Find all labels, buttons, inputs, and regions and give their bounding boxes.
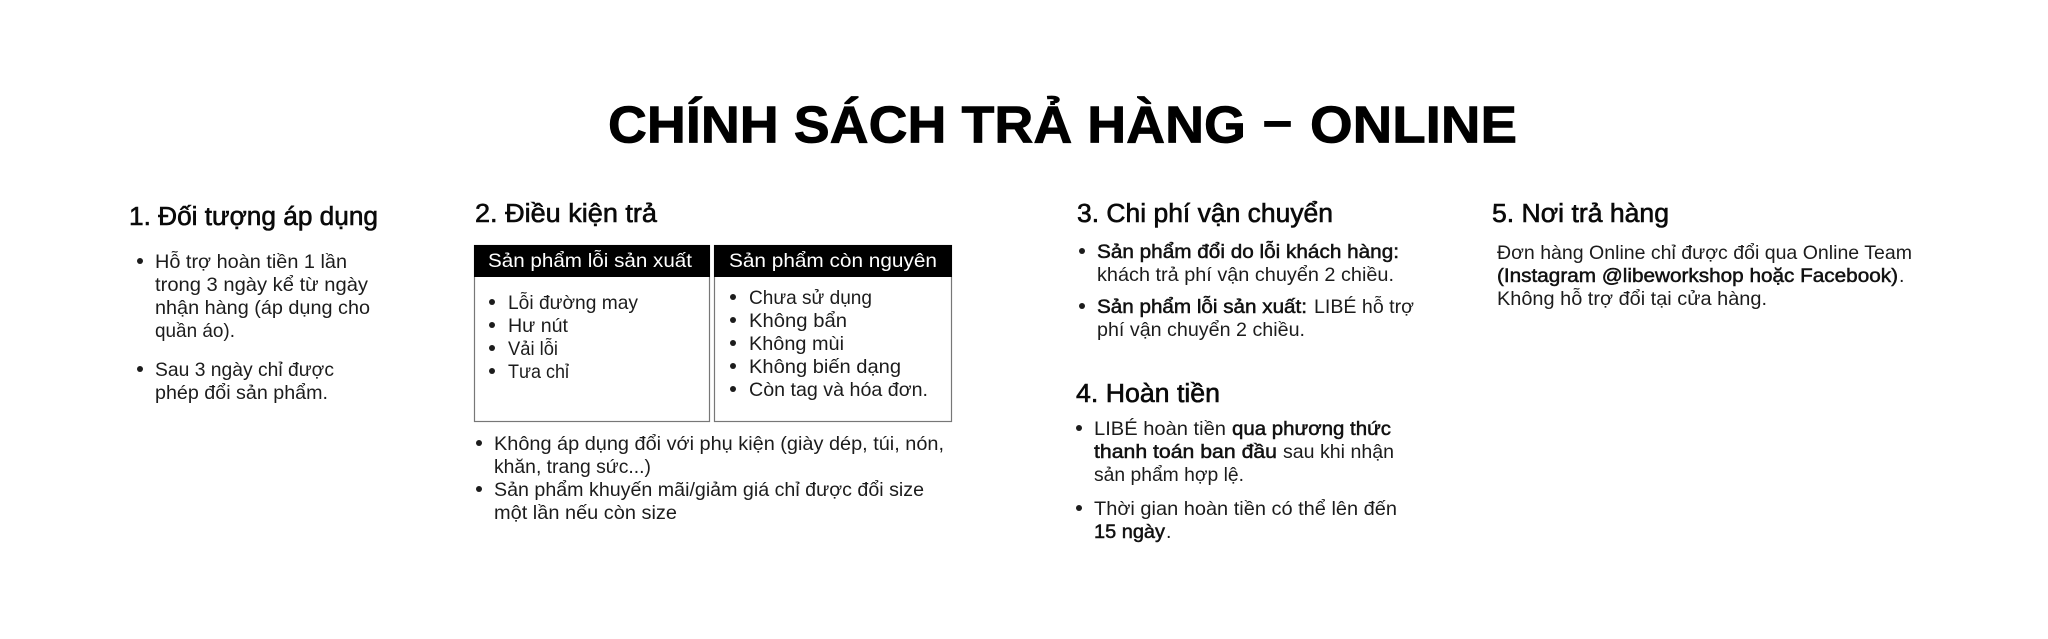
bullet list: section 4: thanh toán ban đầu [1094,441,1277,463]
bullet list: section 3: Sản phẩm lỗi sản xuất: [1097,295,1307,318]
bullet notes under tables: khăn, trang sức...) [494,456,651,478]
bullet notes under tables: Không áp dụng đổi với phụ kiện (giày dép, túi, nón, [494,433,944,455]
bullet notes under tables: một lần nếu còn size [494,502,677,524]
table card: manufacturing defects [474,245,710,422]
table card: manufacturing defects: Hư nút [508,315,569,337]
title: – [1263,92,1292,150]
table card: items in original condition: Sản phẩm còn nguyên [729,250,937,272]
panel: 2. return conditions [474,200,952,524]
text block: section 5 [1497,242,1912,310]
table card: items in original condition: Chưa sử dụng [749,287,872,309]
text block: section 5: (Instagram @libeworkshop hoặc Facebook) [1497,265,1898,287]
table card: manufacturing defects: Sản phẩm lỗi sản xuất [488,249,693,272]
bullet list: section 3: phí vận chuyển 2 chiều. [1097,319,1305,341]
title [608,92,1517,154]
bullet list: section 4 [1076,417,1397,543]
bullet list: section 4: LIBÉ hoàn tiền [1094,417,1226,440]
table card: manufacturing defects: Lỗi đường may [508,291,638,314]
bullet notes under tables: Sản phẩm khuyến mãi/giảm giá chỉ được đổi size [494,479,924,501]
bullet list: section 3: LIBÉ hỗ trợ [1314,295,1414,318]
bullet list: section 4: sau khi nhận [1283,441,1394,463]
bullet list: section 3: khách trả phí vận chuyển 2 chiều. [1097,264,1394,286]
table card: manufacturing defects: Tưa chỉ [508,361,570,383]
text block: section 5: . [1899,265,1904,287]
heading: section 5: 5. Nơi trả hàng [1492,200,1669,228]
panel: 1. applicable subjects [129,203,378,404]
bullet list: section 1: trong 3 ngày kể từ ngày [155,274,368,296]
table card: items in original condition: Không mùi [749,333,844,355]
panel: 4. refund [1076,380,1397,543]
bullet list: section 4: qua phương thức [1232,418,1391,440]
heading: section 2: 2. Điều kiện trả [475,200,658,228]
bullet list: section 4: Thời gian hoàn tiền có thể lên đến [1094,498,1397,520]
bullet list: section 4: sản phẩm hợp lệ. [1094,464,1244,486]
bullet list: section 1 [137,250,370,404]
bullet list: section 1: quần áo). [155,320,235,342]
bullet notes under tables [476,433,944,524]
heading: section 4: 4. Hoàn tiền [1076,380,1220,408]
table card: items in original condition: Không bẩn [749,310,847,332]
bullet list: section 1: Sau 3 ngày chỉ được [155,359,334,381]
bullet list: section 4: 15 ngày [1094,521,1165,543]
panel: 5. return location [1492,200,1912,310]
bullet list: section 1: phép đổi sản phẩm. [155,382,328,404]
bullet list: section 3 [1079,240,1414,341]
bullet list: section 1: Hỗ trợ hoàn tiền 1 lần [155,250,347,273]
bullet list: section 1: nhận hàng (áp dụng cho [155,297,370,319]
title: CHÍNH SÁCH TRẢ HÀNG [608,96,1246,154]
text block: section 5: Không hỗ trợ đổi tại cửa hàng. [1497,287,1767,310]
heading: section 1: 1. Đối tượng áp dụng [129,203,378,231]
bullet list: section 3: Sản phẩm đổi do lỗi khách hàng: [1097,240,1399,263]
title: ONLINE [1310,96,1517,154]
panel: 3. shipping cost [1077,200,1414,341]
text block: section 5: Đơn hàng Online chỉ được đổi qua Online Team [1497,242,1912,264]
table card: items in original condition: Còn tag và hóa đơn. [749,379,928,401]
heading: section 3: 3. Chi phí vận chuyển [1077,200,1333,228]
table card: items in original condition [714,245,952,422]
table card: manufacturing defects: Vải lỗi [508,337,558,360]
bullet list: section 4: . [1166,521,1171,543]
table card: items in original condition: Không biến dạng [749,356,901,378]
